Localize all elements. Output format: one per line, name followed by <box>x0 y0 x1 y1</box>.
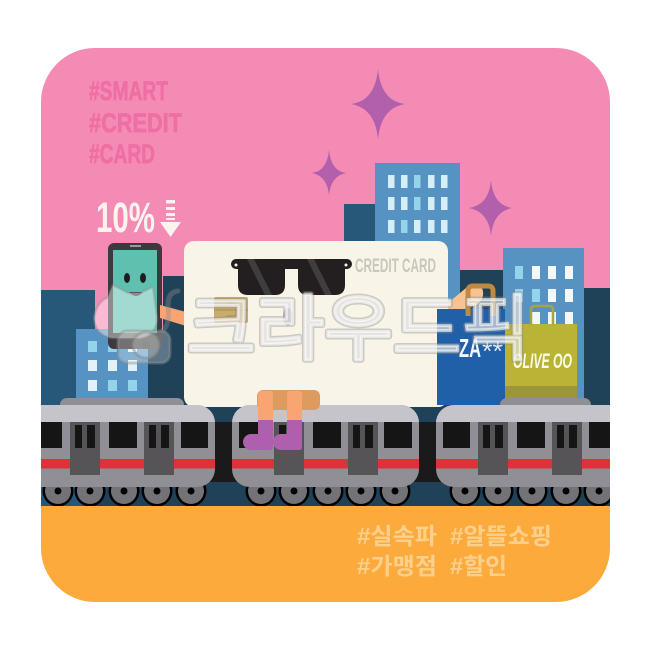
train car 2 <box>232 405 419 487</box>
building: left <box>76 329 148 405</box>
hand holding bag <box>448 288 483 310</box>
shopping bag: ZA**: ** <box>482 336 503 366</box>
Korean hashtags <box>357 523 552 579</box>
shopping bag: OLIVE OO: OLIVE OO <box>513 350 572 373</box>
heading hashtags: #SMART <box>89 76 168 106</box>
Korean hashtags: #실속파 <box>357 523 437 549</box>
discount label 10%: 10% <box>96 194 155 242</box>
sunglasses <box>231 259 352 295</box>
watermark: wordmark: 크라우드픽 <box>187 290 530 370</box>
watermark: wordmark: 크라우드픽 <box>187 290 530 370</box>
card label: CREDIT CARD <box>355 256 436 277</box>
character legs and boots <box>243 390 320 450</box>
orange ground <box>41 506 610 602</box>
arm holding phone <box>160 305 186 326</box>
building: tall centre <box>375 163 460 310</box>
card chip <box>214 297 248 323</box>
shopping bag: ZA**: ZA <box>459 333 481 363</box>
shopping bag: OLIVE OO <box>505 306 577 405</box>
credit card body <box>184 241 448 407</box>
watermark <box>94 285 530 370</box>
Korean hashtags: #알뜰쇼핑 <box>450 523 552 549</box>
dark skyline <box>41 204 610 506</box>
phone character <box>108 243 162 349</box>
rounded panel <box>41 48 614 602</box>
nose <box>283 308 293 326</box>
sparkle stars <box>312 69 512 236</box>
shopping bag: ZA** <box>437 286 505 405</box>
heading hashtags: #CARD <box>89 139 155 169</box>
infographic canvas <box>41 48 610 602</box>
train car 3 <box>436 405 610 487</box>
Korean hashtags: #가맹점 <box>357 553 437 579</box>
wheels <box>42 485 610 506</box>
pink sky background <box>41 48 610 330</box>
train car 1 <box>41 405 215 487</box>
watermark: cat logo <box>94 285 178 363</box>
icon: down arrow <box>160 200 181 237</box>
heading hashtags <box>89 81 182 164</box>
building: right <box>503 248 584 403</box>
train roof vents <box>60 398 591 405</box>
train connectors <box>210 422 441 482</box>
Korean hashtags: #할인 <box>450 553 507 579</box>
heading hashtags: #CREDIT <box>89 108 182 138</box>
